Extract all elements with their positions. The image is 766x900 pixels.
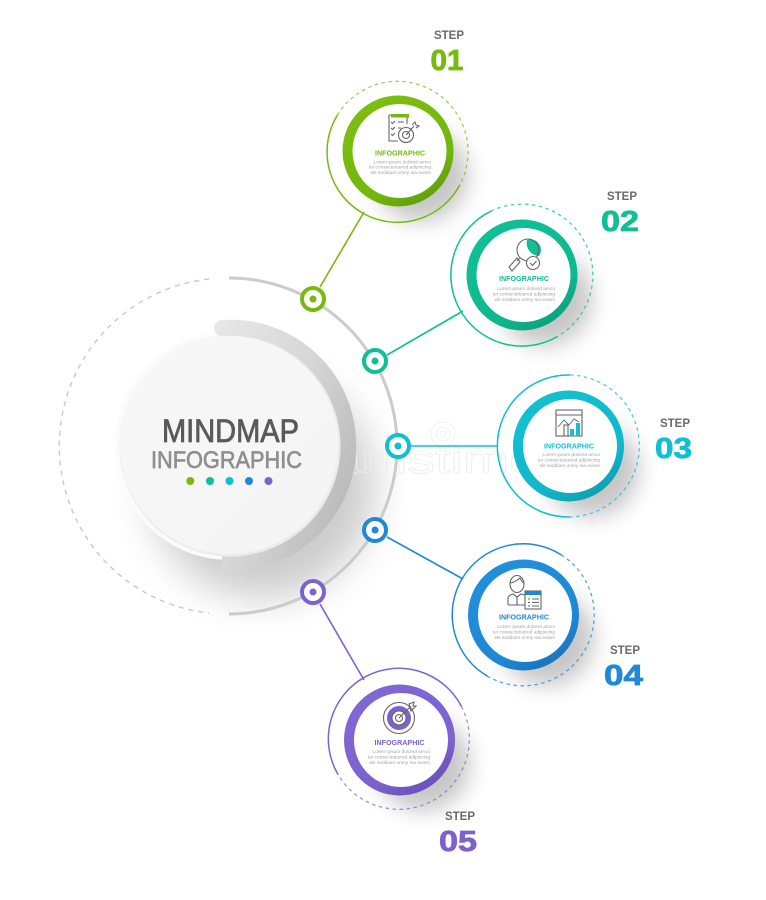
central hub [115, 320, 356, 571]
step label 1: 01 [430, 45, 464, 77]
node 2 [364, 350, 386, 372]
body text 4: elit seddiam unmy nia euism [494, 635, 555, 641]
body text 4: tur consectetuered adipiscing [493, 630, 555, 636]
step label 1: STEP [434, 30, 464, 42]
ring shadow 4 [500, 592, 594, 686]
body text 2: Lorem ipsum dolorsit amco [497, 286, 555, 292]
step label 2: 02 [601, 206, 639, 238]
step label 1 [430, 30, 464, 77]
connector 1 [320, 212, 364, 287]
ring shadow 5 [376, 717, 470, 811]
outer ring 1 [327, 81, 468, 222]
node 1 [302, 288, 324, 310]
badge 3 [513, 390, 624, 502]
panel: step 1 [302, 30, 468, 310]
panel: step 5 [302, 581, 477, 858]
node 4 [364, 519, 386, 541]
connector 2 [387, 311, 463, 355]
body text 1: elit seddiam unmy nia euism [370, 170, 431, 176]
step label 2 [601, 191, 639, 238]
icon: person and list [508, 576, 541, 609]
badge 2 [466, 220, 578, 330]
step label 5 [439, 811, 477, 858]
body text 2 [493, 274, 555, 303]
step label 5: STEP [445, 811, 475, 823]
panel: step 2 [364, 191, 639, 372]
body text 3: tur consectetuered adipiscing [538, 458, 600, 464]
ring shadow 3 [545, 423, 639, 517]
ring shadow 2 [498, 252, 592, 346]
body text 5: tur consectetuered adipiscing [368, 754, 430, 760]
body text 3: INFOGRAPHIC [544, 442, 595, 450]
connector 5 [320, 604, 364, 680]
body text 1 [369, 148, 431, 176]
large orbit ring [59, 278, 397, 614]
outer ring 4 [452, 544, 594, 686]
hub colour dots [186, 477, 272, 485]
step label 3: 03 [655, 433, 692, 465]
body text 5: elit seddiam unmy nia euism [369, 760, 430, 766]
node 5 [302, 581, 324, 603]
body text 4 [493, 612, 555, 641]
body text 4: INFOGRAPHIC [499, 612, 550, 622]
icon: magnifier [509, 239, 541, 271]
central hub shadow [150, 374, 374, 598]
step label 5: 05 [439, 826, 477, 858]
badge 1 [342, 96, 454, 206]
connector 4 [387, 537, 463, 579]
icon: chart window [556, 410, 582, 436]
body text 2: tur consectetuered adipiscing [493, 292, 555, 298]
badge 5 [344, 684, 455, 796]
step label 4 [604, 645, 643, 692]
body text 4: Lorem ipsum dolorsit amco [497, 624, 555, 630]
icon: target [384, 702, 416, 734]
node 3 [387, 435, 409, 457]
body text 1: Lorem ipsum dolorsit amco [373, 159, 431, 165]
outer ring 2 [451, 204, 593, 346]
step label 3: STEP [660, 418, 690, 430]
body text 1: INFOGRAPHIC [375, 148, 426, 158]
hub subtitle: INFOGRAPHIC [151, 447, 302, 474]
badge 4 [468, 560, 579, 670]
body text 2: INFOGRAPHIC [499, 274, 550, 283]
watermark [250, 422, 540, 482]
step label 4: STEP [610, 645, 640, 657]
step label 2: STEP [607, 191, 637, 203]
step label 4: 04 [604, 660, 643, 692]
body text 2: elit seddiam unmy nia euism [494, 297, 555, 303]
icon: checklist and target [389, 114, 419, 142]
panel: step 3 [387, 375, 692, 517]
body text 3: elit seddiam unmy nia euism [539, 463, 600, 469]
body text 5: INFOGRAPHIC [374, 738, 425, 747]
connector 3 [410, 445, 498, 447]
watermark: dreamstime [250, 438, 540, 482]
panel: step 4 [364, 519, 643, 692]
hub title: MINDMAP [162, 413, 299, 449]
body text 5 [368, 738, 430, 766]
body text 1: tur consectetuered adipiscing [369, 165, 431, 171]
body text 3 [538, 442, 600, 469]
step label 3 [655, 418, 692, 465]
body text 5: Lorem ipsum dolorsit amco [372, 749, 430, 755]
outer ring 5 [328, 668, 469, 809]
ring shadow 1 [374, 128, 468, 222]
outer ring 3 [497, 375, 639, 517]
body text 3: Lorem ipsum dolorsit amco [542, 452, 600, 458]
